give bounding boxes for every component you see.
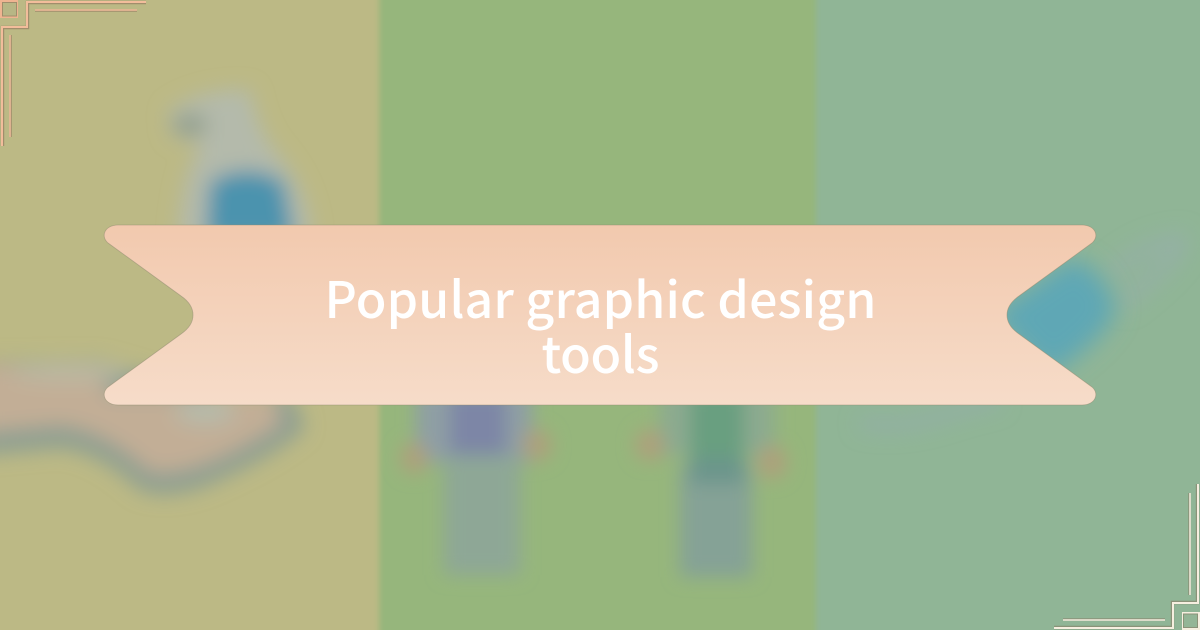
title: Popular graphic design — [324, 261, 876, 333]
blurred bird figure — [168, 90, 312, 240]
blurred mask strap — [1138, 238, 1181, 285]
corner ornament: top left — [0, 0, 146, 146]
blurred figure two — [635, 390, 787, 577]
blurred figure one — [400, 390, 552, 575]
blurred hand shape — [0, 360, 305, 494]
title: tools — [542, 316, 660, 388]
ribbon banner — [104, 225, 1096, 405]
corner ornament: bottom right — [1054, 484, 1200, 630]
blurred mask body — [990, 258, 1116, 375]
title — [324, 261, 876, 388]
